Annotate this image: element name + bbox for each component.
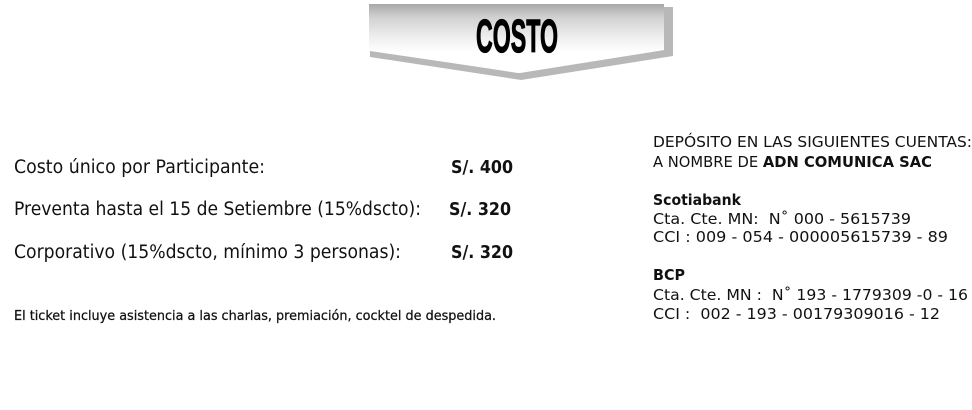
BCP account: CCI : 002 - 193 - 00179309016 - 12 — [653, 305, 940, 323]
banner arrow — [369, 4, 664, 73]
Scotiabank account: Scotiabank — [653, 191, 742, 209]
BCP account: BCP — [653, 266, 685, 284]
deposit heading: A NOMBRE DE ADN COMUNICA SAC — [653, 153, 932, 171]
banner shadow — [370, 7, 673, 80]
price row: corporate: Corporativo (15%dscto, mínimo 3 personas): — [14, 242, 401, 263]
price row: corporate: S/. 320 — [451, 242, 513, 263]
deposit heading — [653, 132, 972, 171]
title banner — [369, 4, 673, 80]
bank deposit details — [653, 132, 972, 323]
price row: single: S/. 400 — [451, 157, 513, 178]
BCP account — [653, 266, 968, 323]
BCP account: Cta. Cte. MN : N˚ 193 - 1779309 -0 - 16 — [653, 286, 968, 304]
Scotiabank account: CCI : 009 - 054 - 000005615739 - 89 — [653, 228, 948, 246]
heading: COSTO — [476, 10, 558, 62]
Scotiabank account — [653, 191, 948, 246]
price row: presale: S/. 320 — [449, 199, 511, 220]
Scotiabank account: Cta. Cte. MN: N˚ 000 - 5615739 — [653, 210, 911, 228]
price row: single: Costo único por Participante: — [14, 157, 265, 178]
ticket note: El ticket incluye asistencia a las charlas, premiación, cocktel de despedida. — [14, 309, 496, 324]
deposit heading: DEPÓSITO EN LAS SIGUIENTES CUENTAS: — [653, 132, 972, 151]
price row: single — [14, 157, 513, 178]
price list — [14, 157, 513, 263]
price row: presale: Preventa hasta el 15 de Setiembre (15%dscto): — [14, 199, 421, 220]
